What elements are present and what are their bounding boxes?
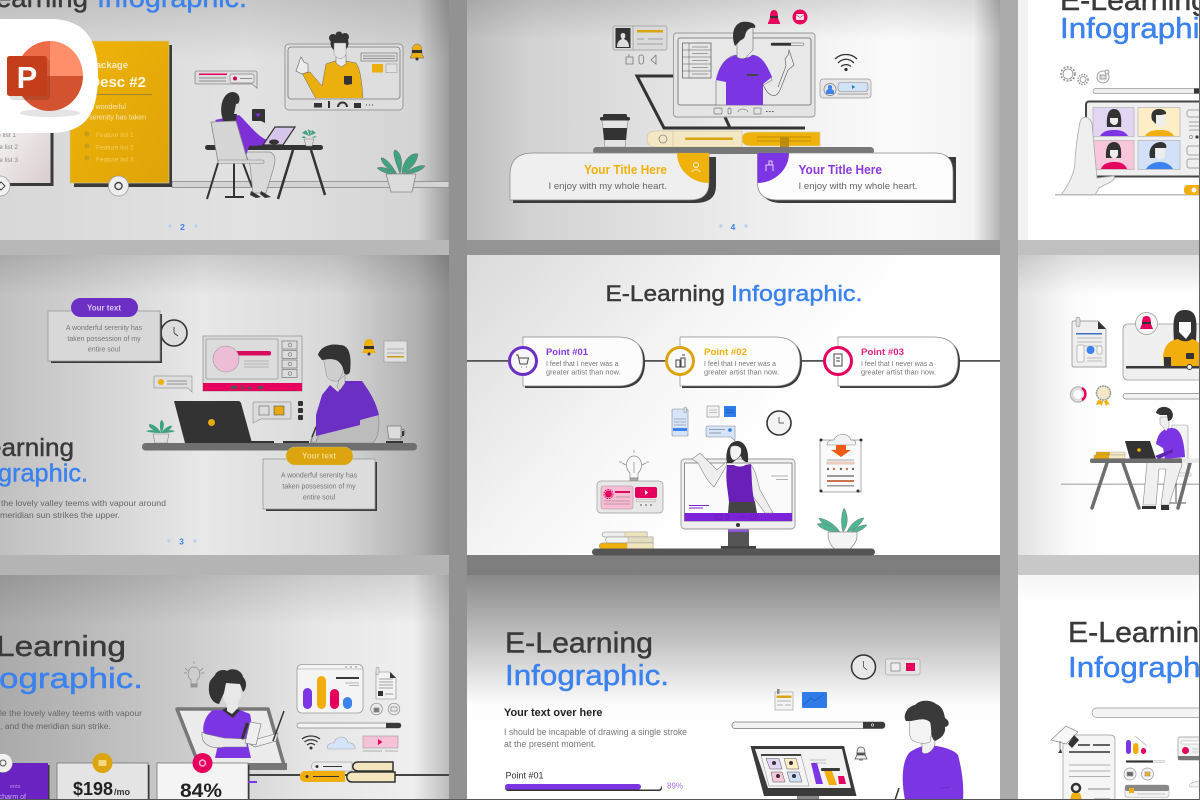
long bar bbox=[1123, 394, 1200, 399]
panel: slide progress bbox=[467, 575, 1000, 800]
document bbox=[376, 667, 396, 699]
title: Infographic. bbox=[731, 281, 862, 306]
title: E-Learning bbox=[606, 281, 725, 306]
price card bbox=[57, 753, 150, 800]
cloud download document bbox=[820, 434, 862, 492]
pile of books bbox=[300, 762, 395, 782]
body text bbox=[504, 727, 687, 749]
point 3: I feel that I never was a bbox=[861, 361, 933, 368]
heading: E-Learning bbox=[505, 628, 653, 660]
woman bbox=[692, 441, 773, 513]
point 1: greater artist than now. bbox=[546, 370, 621, 376]
text box bottom: A wonderful serenity has bbox=[281, 472, 358, 480]
panel: centre slide three points bbox=[467, 255, 1000, 556]
book pile bbox=[599, 532, 653, 549]
video tile 1 bbox=[1093, 108, 1134, 136]
icon: bell bbox=[855, 747, 867, 760]
circle icons bbox=[371, 703, 400, 715]
bell badge bbox=[1136, 312, 1158, 334]
body text: I should be incapable of drawing a single stroke bbox=[504, 727, 687, 737]
point 1 bbox=[510, 337, 645, 388]
hand holding tablet bbox=[1061, 117, 1114, 195]
title card right: Your Title Here bbox=[798, 163, 882, 177]
cloud bbox=[1190, 782, 1200, 787]
heading: Infographic. bbox=[505, 660, 669, 692]
text box bottom: Your text bbox=[302, 452, 336, 460]
timeline line bbox=[467, 360, 1000, 362]
percent card bbox=[157, 753, 250, 800]
pagination bbox=[167, 538, 197, 544]
body text: at the present moment. bbox=[504, 739, 596, 749]
point 2: I feel that I never was a bbox=[704, 361, 776, 368]
icon: bell red bbox=[768, 10, 780, 24]
grey pill bbox=[1125, 785, 1169, 798]
large plant bbox=[377, 150, 425, 192]
circle icons bbox=[1124, 768, 1154, 780]
presentation card bbox=[597, 481, 663, 513]
purple card: ents bbox=[10, 784, 21, 790]
monitor panel bbox=[203, 336, 302, 391]
progress point 1 bbox=[505, 770, 683, 791]
note bbox=[775, 689, 793, 710]
video monitor bbox=[674, 22, 815, 117]
monitor with woman bbox=[1123, 310, 1200, 380]
heading bbox=[0, 631, 143, 695]
text box top: entire soul bbox=[88, 346, 121, 354]
yellow pill bbox=[1184, 185, 1200, 195]
chat bubble bbox=[154, 376, 192, 392]
cloud bbox=[328, 737, 355, 749]
video tile 4 bbox=[1138, 140, 1180, 170]
heading bbox=[505, 628, 669, 692]
teacher in purple tee bbox=[716, 22, 794, 105]
body text: le the lovely valley teems with vapour bbox=[0, 708, 142, 718]
heading bbox=[1068, 617, 1200, 684]
pagination: 4 bbox=[731, 222, 736, 232]
title card left: I enjoy with my whole heart. bbox=[548, 181, 667, 192]
video tile 3 bbox=[1093, 140, 1134, 170]
bulb bbox=[184, 661, 204, 687]
notes panel bbox=[886, 659, 920, 675]
package card 2: serenity has taken bbox=[89, 114, 146, 122]
package card 2: Desc #2 bbox=[89, 74, 146, 91]
video card bbox=[363, 736, 398, 751]
point 3: Point #03 bbox=[861, 347, 904, 358]
laptop bbox=[174, 401, 274, 444]
search bar bbox=[732, 722, 885, 728]
ribbon badge bbox=[1096, 386, 1110, 406]
package card 2: Feature list 3 bbox=[96, 156, 134, 164]
text box bottom: entire soul bbox=[303, 494, 336, 502]
clock bbox=[161, 320, 187, 346]
heading bbox=[0, 434, 88, 488]
illustration: teacher with notepad bbox=[202, 669, 284, 758]
message bubble bbox=[195, 71, 257, 88]
panel: slide video grid bbox=[1018, 0, 1200, 240]
woman presenter monitor bbox=[681, 441, 795, 529]
illustration: person with dreadlocks bbox=[895, 701, 963, 800]
package card 2: Package bbox=[89, 60, 128, 71]
price card: /mo bbox=[114, 787, 130, 798]
subheading: Your text over here bbox=[504, 707, 602, 719]
heading: ographic. bbox=[0, 663, 143, 695]
point 1: I feel that I never was a bbox=[546, 361, 619, 368]
teacher in yellow bbox=[296, 32, 363, 99]
icon: PowerPoint pie: P bbox=[17, 60, 37, 95]
gear icons bbox=[1061, 67, 1109, 84]
chair bbox=[1165, 425, 1191, 503]
floor line bbox=[1055, 194, 1200, 196]
certificate bbox=[1063, 735, 1115, 800]
icon: mail bbox=[792, 10, 808, 24]
side card bbox=[1178, 737, 1200, 760]
package card 2: A wonderful bbox=[89, 104, 126, 111]
panel: slide certificate bbox=[1018, 575, 1200, 800]
point 2: greater artist than now. bbox=[704, 370, 779, 376]
purple card bbox=[0, 754, 50, 800]
desk bbox=[142, 441, 417, 450]
pagination bbox=[168, 224, 198, 230]
table bbox=[1090, 458, 1200, 508]
clock bbox=[767, 411, 791, 435]
package card 2: Feature list 2 bbox=[96, 144, 134, 152]
panel: slide 3 bbox=[0, 255, 449, 555]
plant bbox=[817, 508, 867, 549]
document bbox=[1072, 317, 1106, 367]
floor line bbox=[248, 774, 449, 776]
package card 2 bbox=[70, 41, 172, 196]
chat notes bbox=[253, 401, 303, 423]
pagination: 3 bbox=[179, 536, 184, 546]
text box bottom: taken possession of my bbox=[282, 484, 356, 490]
progress point 1: Point #01 bbox=[506, 770, 544, 780]
laptop bbox=[1125, 441, 1156, 459]
title card right bbox=[758, 153, 956, 203]
plant bbox=[146, 420, 175, 443]
blue chart bbox=[802, 692, 827, 708]
desk bbox=[592, 548, 875, 556]
heading bbox=[0, 0, 247, 13]
coffee cup bbox=[600, 114, 630, 147]
floor bbox=[1061, 484, 1200, 485]
illustration: student at desk bbox=[205, 92, 325, 199]
body text bbox=[0, 710, 142, 730]
graduation cap bbox=[1051, 726, 1079, 753]
point 3 bbox=[824, 337, 960, 388]
mini bars bbox=[1126, 736, 1165, 762]
small tools bbox=[626, 54, 656, 64]
icon: bell bbox=[410, 44, 424, 60]
text box top: taken possession of my bbox=[67, 336, 141, 343]
video pill bbox=[820, 79, 871, 98]
laptop bbox=[177, 709, 284, 765]
icon: wifi bbox=[835, 54, 857, 70]
illustration: man at table bbox=[1142, 407, 1185, 510]
checklist bbox=[682, 43, 711, 78]
title bbox=[606, 281, 862, 306]
illustration: man writing bbox=[310, 344, 379, 443]
price card: $198 bbox=[73, 778, 113, 799]
video tile 2 bbox=[1138, 108, 1180, 136]
icon: bell bbox=[362, 339, 376, 356]
body text: meridian sun strikes the upper. bbox=[0, 510, 120, 520]
tablet bbox=[1086, 102, 1200, 176]
heading: graphic. bbox=[0, 460, 88, 488]
pagination bbox=[719, 222, 748, 232]
video call monitor bbox=[285, 32, 403, 110]
books bbox=[1094, 452, 1125, 458]
search bar bbox=[1092, 708, 1200, 718]
sticky notes bbox=[707, 406, 736, 417]
heart chat icon bbox=[252, 109, 265, 123]
search bar bbox=[297, 723, 401, 728]
package card 2: Feature list 1 bbox=[96, 132, 134, 139]
title card left: Your Title Here bbox=[584, 163, 667, 177]
monitor stand bbox=[721, 530, 756, 550]
text box top bbox=[48, 298, 162, 363]
desktop tilted screen bbox=[750, 746, 856, 800]
title card left bbox=[510, 153, 716, 203]
text box top: Your text bbox=[87, 304, 121, 312]
book stack bbox=[647, 131, 820, 150]
light bulb bbox=[619, 450, 649, 481]
body text: the lovely valley teems with vapour around bbox=[1, 498, 166, 508]
panel: slide pricing bbox=[0, 575, 449, 800]
floor line bbox=[172, 182, 449, 188]
point 3: greater artist than now. bbox=[861, 370, 936, 376]
title card right: I enjoy with my whole heart. bbox=[798, 181, 918, 192]
pagination: 2 bbox=[180, 222, 185, 232]
panel: slide 4 two titles bbox=[467, 0, 1000, 240]
body text: , and the meridian sun strike. bbox=[0, 721, 111, 731]
panel: slide webinar bbox=[1018, 255, 1200, 555]
open laptop bbox=[637, 76, 805, 128]
point 2: Point #02 bbox=[704, 347, 747, 358]
panel: slide 2 package bbox=[0, 0, 449, 240]
chat blue bbox=[706, 426, 735, 441]
body text bbox=[0, 500, 166, 520]
progress point 1: 89% bbox=[667, 780, 683, 790]
point 1: Point #01 bbox=[546, 347, 589, 358]
mug bbox=[386, 426, 405, 443]
document blue bbox=[672, 407, 688, 436]
donut bbox=[1070, 387, 1086, 402]
badge: PowerPoint logo bbox=[0, 19, 98, 133]
icon: wifi bbox=[302, 736, 320, 749]
point 2 bbox=[666, 337, 802, 388]
progress bar bbox=[1093, 88, 1200, 94]
note bbox=[384, 341, 407, 362]
small plant bbox=[301, 129, 317, 146]
desk bbox=[593, 147, 874, 154]
side controls bbox=[1187, 110, 1200, 168]
id card bbox=[613, 26, 667, 50]
package card 1 bbox=[0, 132, 54, 196]
text box bottom bbox=[263, 447, 377, 511]
chart card bbox=[297, 664, 363, 713]
clock bbox=[852, 655, 876, 679]
text box top: A wonderful serenity has bbox=[66, 325, 143, 332]
